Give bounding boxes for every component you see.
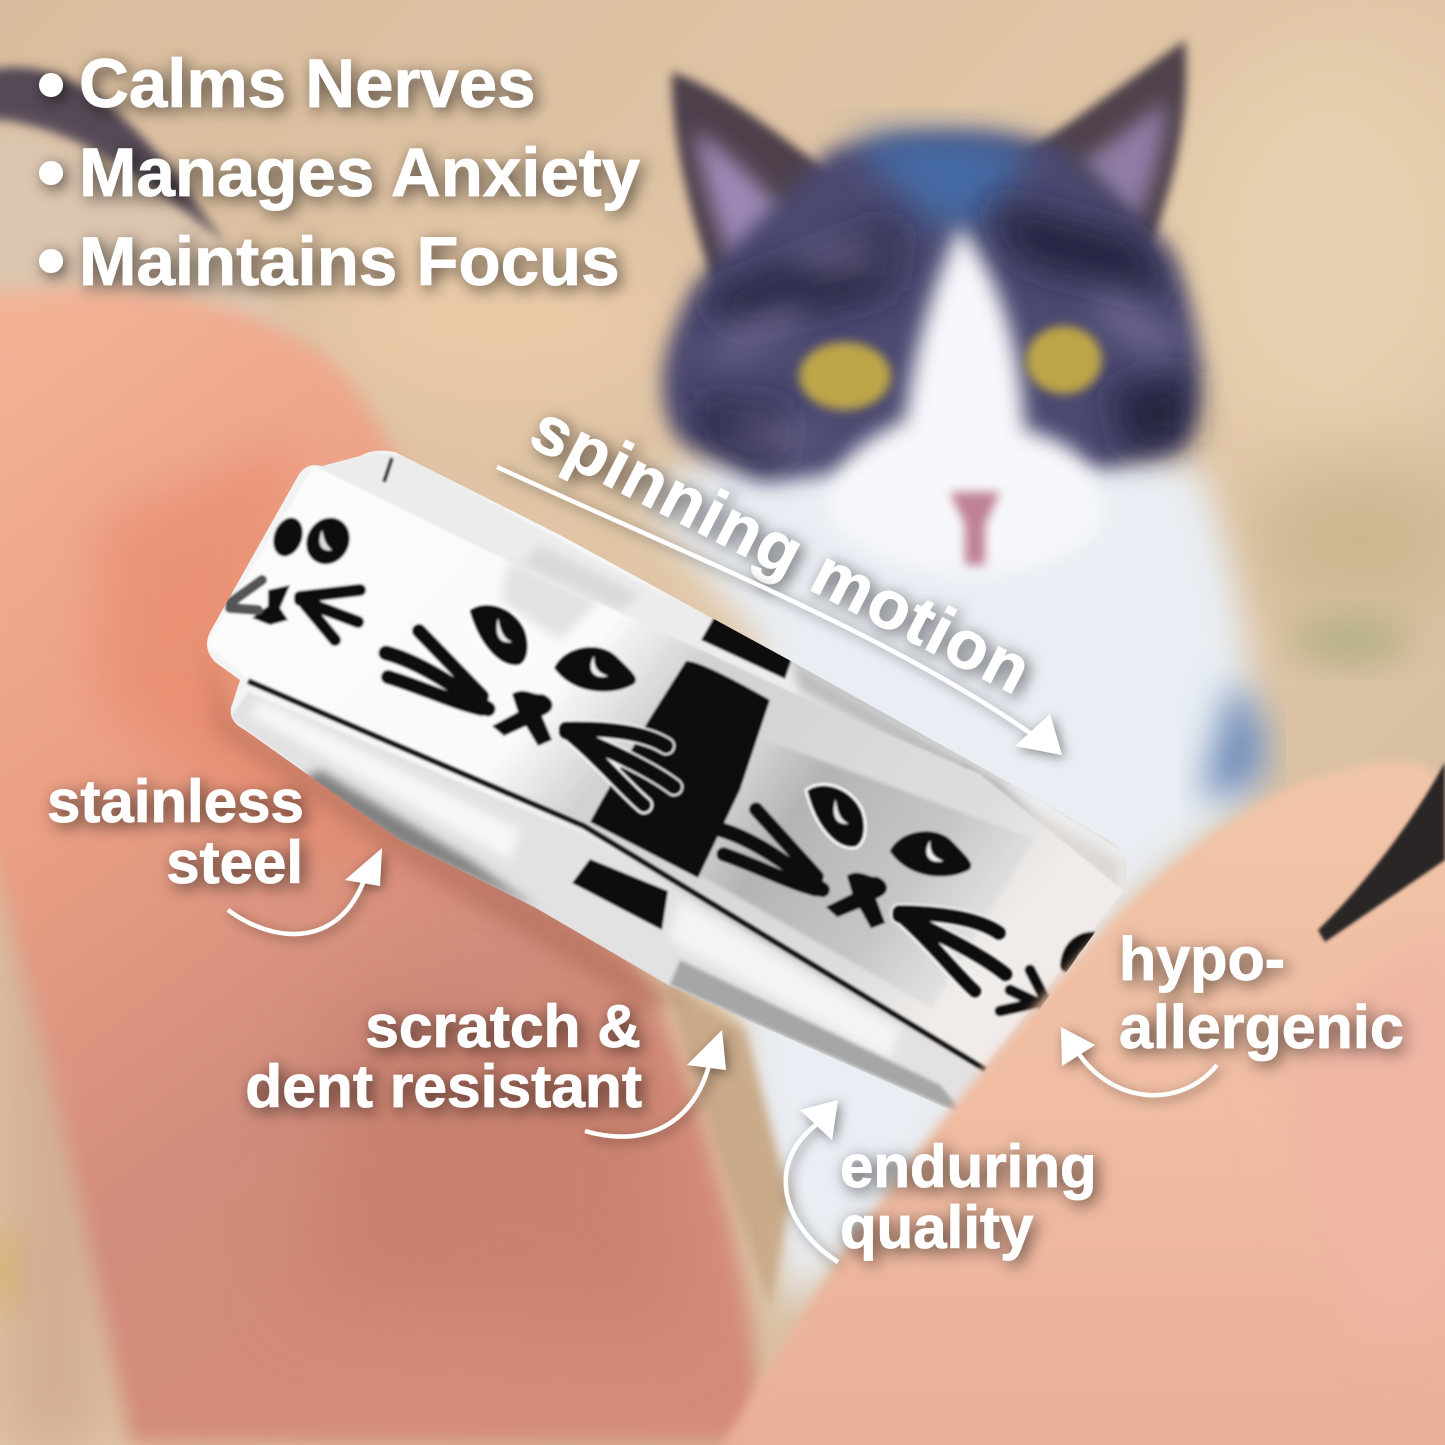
thumb <box>715 762 1445 1445</box>
cat face: right <box>717 781 1012 992</box>
arrow: enduring quality <box>786 1100 838 1262</box>
label: scratch and dent resistant <box>245 992 642 1120</box>
arrow: hypo-allergenic <box>1061 1027 1217 1095</box>
top-left blurred object <box>0 67 300 340</box>
ring plate <box>698 726 1034 1008</box>
finger lower shading <box>300 1000 680 1330</box>
label: stainless steel: stainless <box>47 768 304 835</box>
cat face: far right, partly hidden <box>1000 940 1095 1011</box>
cat head pale stripes <box>720 255 1170 440</box>
ring base <box>207 450 1126 1072</box>
label: scratch and dent resistant: scratch & <box>365 992 641 1060</box>
label: enduring quality <box>840 1133 1097 1261</box>
left finger <box>0 287 762 1445</box>
cat face: left, partly hidden <box>230 510 360 640</box>
bullet list: Calms Nerves <box>79 45 535 122</box>
arrow: spinning motion <box>497 467 1062 755</box>
arrow: stainless steel <box>228 848 382 934</box>
cat ears <box>672 72 880 300</box>
cat body <box>640 432 1253 1310</box>
ring cat band <box>258 520 1123 1063</box>
bullet list: Maintains Focus <box>79 223 620 300</box>
label: enduring quality: enduring <box>840 1133 1097 1200</box>
black reflections <box>701 614 794 679</box>
cat <box>640 40 1266 1310</box>
ring shadow on finger <box>206 644 680 1010</box>
label: hypo-allergenic <box>1119 925 1404 1061</box>
ring back rim <box>428 492 1124 888</box>
label: enduring quality: quality <box>840 1194 1034 1261</box>
cat face white blaze <box>828 225 1102 574</box>
label: scratch and dent resistant: dent resistant <box>245 1052 642 1120</box>
bullet list <box>39 45 640 300</box>
ring <box>190 440 1150 1140</box>
label: stainless steel <box>47 768 304 896</box>
thumbnail dark tip <box>1318 762 1445 942</box>
label: stainless steel: steel <box>166 829 303 896</box>
bullet list: Manages Anxiety <box>79 134 640 211</box>
arrow: scratch and dent resistant <box>585 1030 726 1137</box>
label: spinning motion: spinning motion <box>519 390 1044 709</box>
cat head dark patches <box>700 200 1190 470</box>
cat nose <box>950 492 1000 565</box>
ring lower band <box>232 692 846 1023</box>
cat head <box>663 134 1200 480</box>
label: hypo-allergenic: hypo- <box>1119 925 1285 993</box>
right finger <box>1288 930 1445 1340</box>
label: hypo-allergenic: allergenic <box>1119 993 1404 1061</box>
cat eyes <box>799 342 891 410</box>
ring groove <box>248 681 986 1070</box>
cat face: centre <box>386 604 674 805</box>
finger red shading by ring <box>100 440 430 880</box>
